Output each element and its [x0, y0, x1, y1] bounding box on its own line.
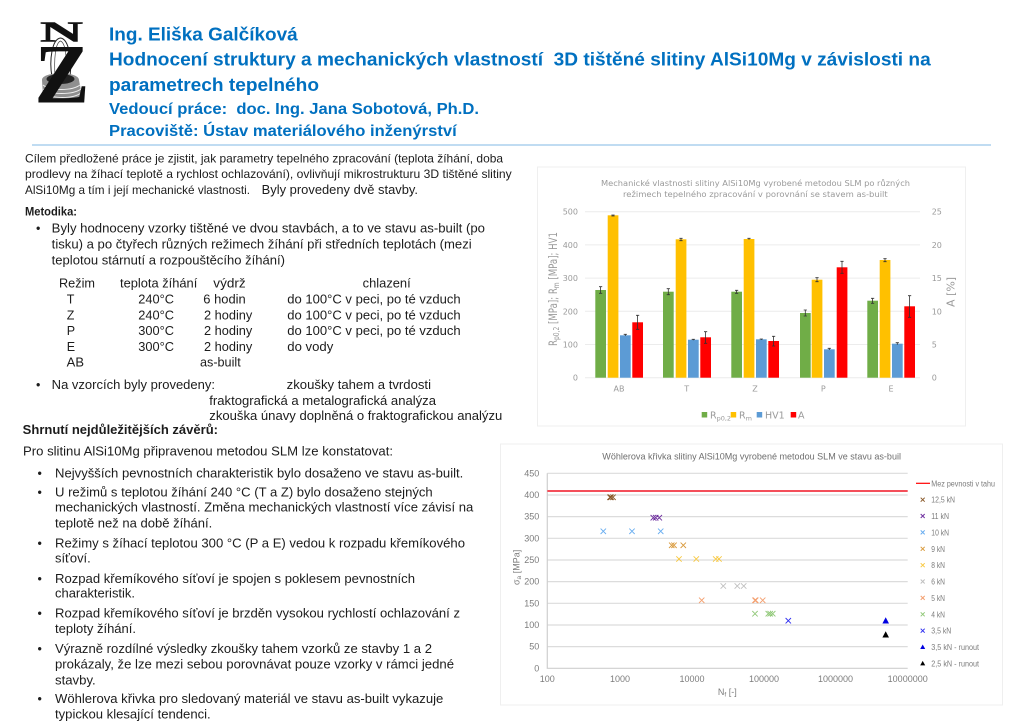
data: 5 kN [699, 598, 765, 603]
x axis title: f [724, 692, 726, 698]
chart legend: 10 kN [931, 528, 949, 537]
list: conclusions: • [38, 642, 42, 656]
text block: tests performed: zkoušky tahem a tvrdosti [287, 378, 431, 392]
x axis labels: 100000 [749, 674, 779, 684]
list: conclusions: typickou klesající tendenci. [55, 708, 211, 722]
y axis labels: 0 [534, 663, 539, 673]
text block: aim of the thesis [25, 152, 512, 197]
left axis title: R [546, 338, 560, 346]
table: heat treatment regimes: teplota žíhání [120, 276, 198, 290]
list: conclusions: Nejvyšších pevnostních charakteristik bylo dosaženo ve stavu as-built. [55, 466, 463, 480]
chart legend: 6 kN [931, 578, 945, 586]
right axis labels: 25 [932, 208, 942, 217]
list: conclusions: Výrazně rozdílné výsledky zkoušky tahem vzorků ze stavby 1 a 2 [55, 642, 432, 656]
data: 3,5 kN [786, 618, 791, 623]
chart legend: 9 kN [931, 545, 945, 554]
text block: summary intro: Pro slitinu AlSi10Mg připravenou metodou SLM lze konstatovat: [23, 445, 393, 459]
right axis labels: 10 [932, 307, 942, 316]
y axis labels: 250 [524, 555, 539, 565]
data: 11 kN [651, 515, 662, 520]
list: conclusions: U režimů s teplotou žíhání 240 °C (T a Z) bylo dosaženo stejných [55, 486, 433, 500]
data: 4 kN [752, 611, 775, 616]
table: heat treatment regimes: 240°C [138, 308, 174, 322]
table: heat treatment regimes: 6 hodin [203, 292, 246, 306]
title block: Pracoviště: Ústav materiálového inženýrství [109, 121, 457, 140]
chart legend [702, 410, 805, 422]
table: heat treatment regimes: 300°C [138, 324, 174, 338]
left axis title: [MPa]; R [546, 288, 560, 327]
chart legend: 11 kN [931, 512, 949, 521]
y axis labels: 150 [524, 598, 539, 608]
chart legend: HV1 [765, 410, 785, 422]
chart legend: 8 kN [931, 561, 945, 570]
chart title: Wöhlerova křivka slitiny AlSi10Mg vyrobené metodou SLM ve stavu as-buil [602, 451, 901, 462]
bars: Rp0,2 [595, 290, 878, 378]
left axis labels: 300 [563, 274, 578, 283]
chart legend: A [798, 410, 805, 422]
left axis title: p0,2 [552, 327, 561, 340]
x axis labels: 100 [540, 674, 555, 684]
heading: Metodika: Metodika: [25, 205, 77, 219]
chart legend: R [710, 410, 717, 422]
text block: methodology bullet: teplotou stárnutí a rozpouštěcího žíhání) [52, 253, 285, 267]
list: conclusions: Režimy s žíhací teplotou 300 °C (P a E) vedou k rozpadu křemíkového [55, 536, 465, 550]
y axis labels: 100 [524, 620, 539, 630]
list: conclusions: Rozpad křemíkového síťoví je spojen s poklesem pevnostních [55, 572, 415, 586]
category labels: AB [614, 384, 624, 394]
left axis title: [MPa]; HV1 [546, 232, 560, 282]
chart legend: m [746, 414, 752, 422]
list: conclusions: • [38, 536, 42, 550]
data: 10 kN [601, 529, 663, 534]
table: heat treatment regimes: výdrž [213, 276, 246, 290]
list: conclusions: stavby. [55, 673, 96, 687]
data: 12,5 kN [607, 495, 616, 500]
right axis labels: 5 [932, 340, 937, 350]
list: conclusions: Rozpad křemíkového síťoví je brzděn vysokou rychlostí ochlazování z [55, 607, 460, 621]
list: conclusions: síťoví. [55, 552, 91, 566]
icon: institute logo with letters N Z and a well: N [40, 18, 83, 49]
error bars [599, 215, 911, 350]
list: conclusions: • [38, 486, 42, 500]
panel: Wöhler curve scatter chart [500, 444, 1002, 705]
list: conclusions: • [38, 607, 42, 621]
chart legend: 4 kN [931, 610, 945, 619]
table: heat treatment regimes: 2 hodiny [204, 340, 253, 354]
table: heat treatment regimes: do 100°C v peci, po té vzduch [287, 324, 461, 338]
chart legend: 5 kN [931, 594, 945, 603]
list: conclusions [38, 466, 473, 722]
table: heat treatment regimes: E [67, 340, 75, 354]
left axis labels: 100 [563, 340, 578, 350]
list: conclusions: mechanických vlastností. Změna mechanických vlastností více závisí na [55, 501, 473, 515]
chart title: režimech tepelného zpracování v porovnání se stavem as-built [623, 189, 888, 199]
data: 3,5 kN runout [882, 617, 889, 624]
text block: aim of the thesis: AlSi10Mg a tím i její mechanické vlastnosti. [25, 183, 250, 197]
table: heat treatment regimes: T [67, 292, 75, 306]
table: heat treatment regimes: as-built [200, 356, 241, 370]
left axis title: m [552, 282, 561, 288]
x axis labels: 10000 [679, 674, 705, 684]
list: conclusions: • [38, 692, 42, 706]
x axis title: [-] [726, 687, 737, 697]
text block: tests performed: fraktografická a metalografická analýza [209, 394, 436, 408]
y axis labels: 400 [524, 490, 539, 500]
y axis labels: 450 [524, 468, 539, 478]
table: heat treatment regimes: Režim [59, 276, 95, 290]
left axis labels: 400 [563, 241, 578, 250]
list: conclusions: teploty žíhání. [55, 622, 136, 636]
title block [109, 24, 931, 140]
y axis labels: 200 [524, 577, 539, 587]
data: 9 kN [669, 543, 686, 548]
category labels: Z [752, 384, 758, 394]
text block: aim of the thesis: Byly provedeny dvě stavby. [262, 183, 418, 197]
text block: tests performed [36, 378, 502, 423]
left axis labels: 200 [563, 307, 578, 316]
list: conclusions: charakteristik. [55, 587, 135, 601]
y axis title: [MPa] [512, 550, 522, 576]
text block: aim of the thesis: Cílem předložené práce je zjistit, jak parametry tepelného zpracování (teplota žíhání, doba [25, 152, 503, 166]
x axis labels: 1000 [610, 674, 630, 684]
text block: aim of the thesis: prodlevy na žíhací teplotě a rychlost ochlazování), ovlivňují mikrostrukturu 3D tištěné slitiny [25, 167, 512, 181]
right axis labels: 0 [932, 374, 937, 383]
chart legend: 3,5 kN - runout [931, 643, 980, 652]
y axis labels: 50 [529, 642, 539, 652]
table: heat treatment regimes: chlazení [363, 276, 411, 290]
text block: methodology bullet [36, 221, 485, 267]
text block: methodology bullet: • [36, 221, 40, 235]
category labels: P [821, 384, 826, 394]
chart legend: 12,5 kN [931, 496, 955, 505]
table: heat treatment regimes: Z [67, 308, 75, 322]
list: conclusions: prokázaly, že lze mezi sebou porovnávat pouze vzorky v rámci jedné [55, 658, 454, 672]
right axis labels [932, 208, 942, 383]
list: conclusions: teplotě než na době žíhání. [55, 516, 212, 530]
chart legend: 2,5 kN - runout [931, 659, 980, 668]
chart legend: Mez pevnosti v tahu [931, 479, 995, 488]
table: heat treatment regimes [59, 276, 461, 370]
right axis labels: 15 [932, 274, 942, 283]
icon: institute logo with letters N Z and a well: Z [34, 27, 90, 121]
y axis labels: 350 [524, 512, 539, 522]
table: heat treatment regimes: do vody [287, 340, 334, 354]
chart legend: 3,5 kN [931, 627, 951, 636]
x axis title: N [718, 687, 724, 697]
right axis title: A [%] [944, 277, 958, 307]
list: conclusions: Wöhlerova křivka pro sledovaný materiál ve stavu as-built vykazuje [55, 692, 443, 706]
y axis title: σ [512, 579, 522, 585]
x axis labels [540, 674, 928, 684]
left axis labels: 500 [563, 208, 578, 217]
table: heat treatment regimes: P [67, 324, 75, 338]
chart legend: p0,2 [717, 414, 731, 422]
table: heat treatment regimes: do 100°C v peci, po té vzduch [287, 292, 461, 306]
bars: Rm [608, 215, 890, 378]
category labels: E [888, 384, 894, 394]
chart title [601, 178, 910, 199]
table: heat treatment regimes: AB [67, 356, 84, 370]
table: heat treatment regimes: 2 hodiny [204, 308, 253, 322]
bars: HV1 [620, 335, 903, 378]
title block: parametrech tepelného [109, 74, 319, 95]
data: 6 kN [721, 583, 746, 589]
text block: tests performed: zkouška únavy doplněná o fraktografickou analýzu [209, 409, 502, 423]
chart title: Mechanické vlastnosti slitiny AlSi10Mg vyrobené metodou SLM po různých [601, 178, 910, 188]
table: heat treatment regimes: 300°C [138, 340, 174, 354]
list: conclusions: • [38, 572, 42, 586]
table: heat treatment regimes: 240°C [138, 292, 174, 306]
tensile strength line [547, 490, 908, 492]
text block: methodology bullet: tisku) a po čtyřech různých režimech žíhání při středních teplotách (mezi [52, 238, 472, 252]
panel: mechanical properties bar chart [538, 167, 966, 426]
x axis labels: 10000000 [888, 674, 928, 684]
chart legend: R [739, 410, 746, 422]
right axis labels: 20 [932, 241, 942, 250]
text block: methodology bullet: Byly hodnoceny vzorky tištěné ve dvou stavbách, a to ve stavu as-built (po [52, 221, 485, 235]
list: conclusions: • [38, 466, 42, 480]
table: heat treatment regimes: 2 hodiny [204, 324, 253, 338]
data: 8 kN [676, 556, 722, 562]
y axis title: a [516, 575, 523, 579]
title block: Ing. Eliška Galčíková [109, 24, 298, 45]
text block: tests performed: • [36, 378, 40, 392]
x axis labels: 1000000 [818, 674, 853, 684]
y axis labels: 300 [524, 533, 539, 543]
left axis labels [563, 208, 578, 383]
title block: Hodnocení struktury a mechanických vlastností 3D tištěné slitiny AlSi10Mg v závislosti na [109, 49, 931, 70]
category labels [614, 384, 894, 394]
table: heat treatment regimes: do 100°C v peci, po té vzduch [287, 308, 461, 322]
y axis labels [524, 468, 539, 673]
heading: summary of conclusions: Shrnutí nejdůležitějších závěrů: [23, 423, 218, 437]
bars: A [632, 267, 915, 378]
data: 2,5 kN runout [882, 631, 889, 638]
title block: Vedoucí práce: doc. Ing. Jana Sobotová, Ph.D. [109, 101, 479, 118]
left axis labels: 0 [573, 374, 578, 383]
text block: tests performed: Na vzorcích byly provedeny: [52, 378, 215, 392]
chart legend [916, 479, 995, 668]
category labels: T [683, 384, 689, 394]
